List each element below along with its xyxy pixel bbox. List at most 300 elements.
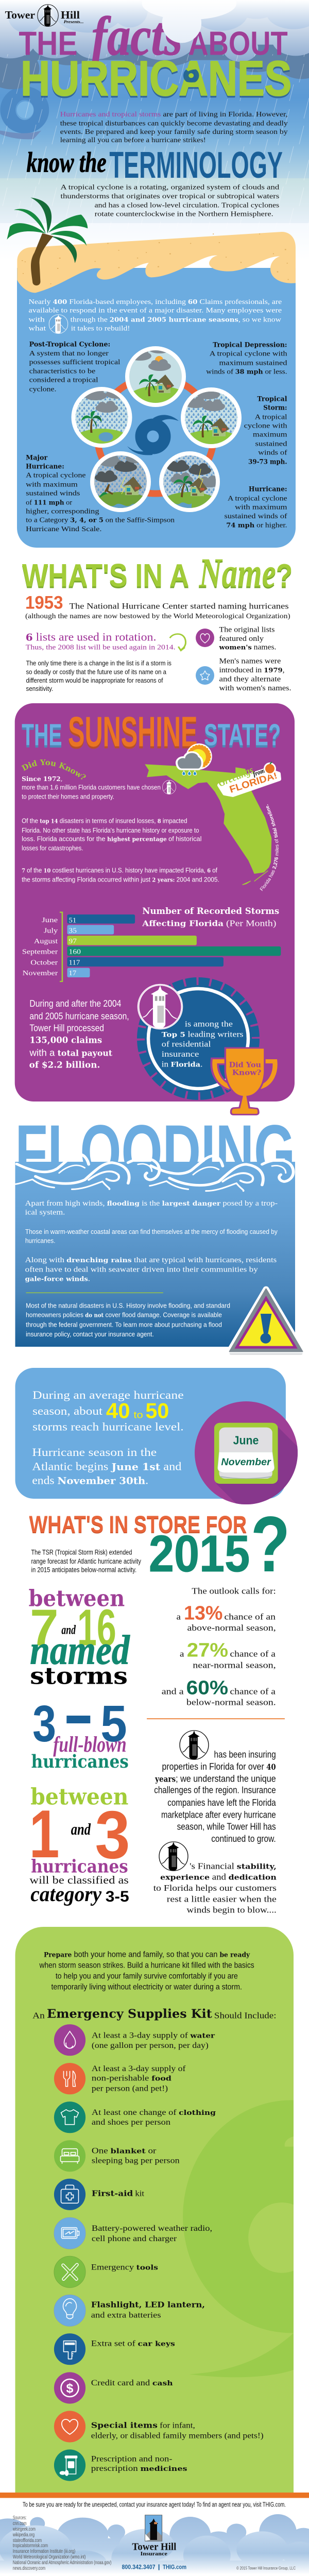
text: employees note: what	[28, 325, 46, 332]
text: flood insurance: insurance policy, contact your insurance agent.	[26, 1331, 154, 1338]
text: costliest hurricanes	[22, 867, 219, 884]
kit item: flashlight: Flashlight, LED lantern,	[91, 2300, 205, 2309]
heading: what's in store for 2015: 2015	[149, 1525, 250, 1582]
text: insured losses: Of the top 14 disasters in terms of insured losses, 8 impacted	[22, 818, 187, 825]
heading: what's in a name: WHAT'S IN A	[22, 560, 189, 596]
text: outlook: above-normal season,	[187, 1623, 276, 1633]
stat: between 7 and 16 named storms: 16	[77, 1599, 116, 1656]
kit item: medicines: Prescription and non-	[91, 2454, 172, 2463]
text: women's names: featured only	[219, 635, 264, 643]
text: tropical cyclone definition: thunderstorms that originates over tropical or subtropical waters	[60, 193, 279, 200]
text: women's names: The original lists	[219, 626, 274, 634]
text: intro: learning all you can before a hurricane strikes!	[60, 137, 206, 144]
text: outlook: The outlook calls for:	[192, 1586, 276, 1596]
sticker: greetings from Florida: from	[252, 767, 266, 778]
text: financial stability: rest a little easier when the	[167, 1894, 277, 1904]
text: sources: stateofflorida.com	[13, 2538, 42, 2544]
title: The facts about Hurricanes	[19, 6, 291, 108]
badge text: is among the	[185, 1019, 233, 1028]
panel: terminology card	[7, 197, 296, 548]
text: financial stability: experience and dedication	[160, 1872, 277, 1882]
text: employees note	[28, 298, 282, 332]
stat: 3-5 full-blown hurricanes: 5	[100, 1695, 127, 1752]
icon: trophy did you know	[215, 1048, 275, 1114]
kit item: water	[54, 2024, 215, 2056]
text: men's names	[219, 657, 291, 692]
text: Tower Hill insuring Florida: properties in Florida for over 40	[162, 1761, 276, 1772]
text: sensitivity note	[26, 660, 171, 693]
icon: calendar June to November	[195, 1401, 298, 1504]
text: storms per season: 40	[106, 1398, 130, 1423]
logo: Tower Hill Insurance	[132, 2515, 176, 2557]
text: tropical storm: sustained	[255, 440, 287, 448]
badge text: in Florida.	[162, 1060, 202, 1069]
text: hurricane: with maximum	[235, 503, 287, 511]
text: season dates: Atlantic begins June 1st and	[32, 1460, 181, 1473]
heading: know the terminology: know the	[27, 146, 107, 178]
kit item: tools	[54, 2256, 158, 2287]
text: post-tropical cyclone: A system that no longer	[29, 350, 109, 358]
kit item: car keys: Extra set of car keys	[91, 2338, 175, 2348]
text: tropical depression: A tropical cyclone with	[210, 350, 287, 358]
heading: the sunshine state: THE	[22, 720, 62, 754]
text: sensitivity note: sensitivity.	[26, 685, 53, 693]
month labels and values: June	[42, 917, 58, 924]
text: outlook: chance of a	[230, 1649, 276, 1658]
panel: hurricane season	[15, 1368, 309, 1510]
text: prepare: temporarily living without electricity or water during a storm.	[51, 1983, 242, 1991]
month labels and values: July	[44, 927, 58, 935]
text: major hurricane: to a Category 3, 4, or 5 on the Saffir-Simpson	[26, 516, 175, 524]
text: since 1972: Since 1972,	[22, 776, 63, 783]
text: major hurricane: Hurricane:	[26, 463, 64, 470]
kit item: medicines	[54, 2449, 187, 2481]
month labels and values: 160	[69, 948, 81, 956]
stat: between 7 and 16 named storms: 7	[30, 1599, 59, 1656]
text: since 1972	[22, 776, 161, 801]
kit item: special items: Special items for infant,	[91, 2421, 195, 2430]
text: flooding danger	[25, 1199, 278, 1293]
text: post-tropical cyclone	[29, 341, 120, 393]
stat: between 1 and 3 category 3-5: between	[30, 1784, 128, 1810]
text: insured losses: Florida. No other state has Florida's hurricane history or exposure to	[22, 827, 199, 835]
stat: 3-5 full-blown hurricanes: 3	[32, 1695, 56, 1752]
text: men's names: with women's names.	[219, 684, 291, 692]
text: outlook: chance of an	[224, 1612, 276, 1621]
text: claims processed: with a total payout	[29, 1048, 112, 1058]
text: outlook: 13%	[184, 1602, 222, 1624]
title: The facts about Hurricanes: THE	[19, 24, 77, 62]
text: hurricane	[224, 485, 288, 529]
text: major hurricane: higher, corresponding	[26, 508, 99, 515]
dark cloud layer	[0, 21, 309, 89]
text: tropical depression: maximum sustained	[219, 360, 287, 367]
text: 1953 naming history	[25, 592, 290, 620]
kit item: clothing: At least one change of clothing	[92, 2108, 216, 2117]
kit item: blanket	[54, 2140, 180, 2172]
month labels and values: August	[34, 938, 58, 945]
text: sources: Insurance Information Institute (iii.org)	[13, 2549, 75, 2554]
text: storms per season: season, about	[32, 1404, 102, 1418]
text: claims processed: 135,000 claims	[29, 1035, 102, 1045]
icon: calendar June to November: November	[221, 1456, 272, 1468]
text: flood insurance: homeowners policies do not cover flood damage. Coverage is available	[26, 1312, 222, 1319]
stat: between 7 and 16 named storms: and	[61, 1622, 76, 1637]
month labels and values: 117	[69, 959, 80, 967]
text: outlook: a	[176, 1612, 181, 1621]
stat: between 1 and 3 category 3-5: 3-5	[106, 1888, 129, 1905]
badge text	[162, 1019, 244, 1069]
icon: warning triangle	[230, 1289, 302, 1353]
stat: between 1 and 3 category 3-5: category	[30, 1882, 102, 1906]
text: tropical storm: Storm:	[263, 404, 287, 412]
text: tropical cyclone definition: and has a closed low-level circulation. Tropical cyclones	[95, 202, 279, 209]
chart: recorded storms per month	[22, 906, 281, 981]
text: six lists in rotation: 6 lists are used in rotation.	[26, 631, 156, 643]
text: outlook: near-normal season,	[193, 1660, 276, 1670]
text: since 1972: to protect their homes and property.	[22, 793, 114, 801]
stat: between 1 and 3 category 3-5: and	[71, 1821, 91, 1838]
text: employees note: Nearly 400 Florida-based employees, including 60 Claims professionals, are	[28, 298, 282, 306]
text: Tower Hill insuring Florida	[154, 1731, 276, 1844]
chart title: Affecting Florida (Per Month)	[142, 918, 276, 928]
chart title	[142, 906, 279, 928]
kit item: flashlight	[54, 2295, 205, 2326]
icon: heart badge	[196, 629, 214, 647]
heading: what's in store for 2015: ?	[251, 1500, 290, 1588]
kit item: water: (one gallon per person, per day)	[92, 2041, 209, 2050]
text: claims processed: Tower Hill processed	[29, 1023, 104, 1033]
stat: between 7 and 16 named storms: storms	[30, 1663, 128, 1689]
header: rain streaks	[0, 54, 309, 229]
kit item: credit card and cash: $	[66, 2381, 74, 2396]
kit item: credit card and cash	[54, 2372, 173, 2404]
icon: small white tower	[162, 780, 176, 794]
stat: between 1 and 3 category 3-5: 3	[95, 1798, 130, 1873]
text: insured losses	[22, 818, 201, 852]
kit item: clothing	[54, 2102, 216, 2133]
text: tropical storm: A tropical	[255, 413, 287, 421]
text: since 1972: more than 1.6 million Florida customers have chosen	[22, 784, 161, 791]
text: intro: Hurricanes and tropical storms are part of living in Florida. However,	[60, 111, 288, 118]
text: major hurricane: with maximum	[26, 481, 78, 488]
kit item: radio and charger: cell phone and charger	[92, 2234, 177, 2243]
beach sand	[17, 232, 296, 293]
icon: sun and rain cloud	[177, 743, 212, 775]
stat: 3-5 full-blown hurricanes: hurricanes	[31, 1751, 129, 1772]
text: 1953 naming history: 1953	[25, 592, 63, 613]
text: claims processed	[29, 998, 129, 1070]
text: flooding danger: Along with drenching rains that are typical with hurricanes, residents	[25, 1256, 277, 1264]
text: hurricane: Hurricane:	[249, 485, 287, 493]
footer clouds	[0, 2514, 309, 2576]
heading: know the terminology	[27, 144, 283, 186]
scene: tropical depression	[125, 346, 186, 407]
map: Florida	[145, 764, 271, 885]
badge text: Top 5 leading writers	[162, 1029, 244, 1039]
text: employees note: with	[28, 316, 45, 324]
text: tropical storm: maximum	[253, 431, 287, 438]
month labels and values: 17	[69, 970, 77, 977]
text: hurricane: 74 mph or higher.	[226, 521, 287, 529]
text: storms per season: During an average hurricane	[32, 1388, 184, 1402]
badge text: of residential	[162, 1040, 211, 1048]
text: flooding danger: often have to deal with seawater driven into their communities by	[25, 1265, 258, 1274]
text: TSR forecast: The TSR (Tropical Storm Risk) extended	[31, 1548, 132, 1556]
month labels and values: September	[22, 948, 58, 956]
text: tropical storm: Tropical	[257, 395, 287, 403]
text: sources: National Oceanic and Atmospheric Administration (noaa.gov)	[13, 2560, 111, 2566]
text: storms per season: 50	[145, 1398, 169, 1423]
text: outlook: a	[180, 1649, 184, 1658]
text: sources: wisegeek.com	[12, 2527, 36, 2532]
text: TSR forecast: in 2015 anticipates below-normal activity.	[31, 1566, 136, 1574]
text: prepare	[39, 1950, 254, 1991]
text: outlook: and a	[162, 1686, 184, 1696]
text: hurricane: A tropical cyclone	[228, 495, 287, 502]
header: foreground white clouds	[142, 0, 236, 43]
scene: major hurricane	[90, 451, 151, 512]
text: major hurricane: Major	[26, 454, 48, 462]
text: intro	[60, 111, 288, 144]
stat: between 1 and 3 category 3-5	[29, 1784, 130, 1906]
logo: Tower Hill presents: Hill	[61, 9, 80, 21]
heading: emergency supplies kit: Should Include:	[214, 2010, 276, 2020]
logo: Tower Hill Insurance: Insurance	[140, 2551, 167, 2557]
text: Tower Hill insuring Florida: continued to grow.	[211, 1834, 276, 1844]
stat: 3-5 full-blown hurricanes	[31, 1695, 129, 1772]
text: costliest hurricanes: 7 of the 10 costliest hurricanes in U.S. history have impacted Florida, 6 of	[22, 867, 217, 874]
heading: emergency supplies kit: Emergency Supplies Kit	[47, 2006, 212, 2021]
text: outlook: 60%	[186, 1676, 228, 1699]
text: tropical cyclone definition: A tropical cyclone is a rotating, organized system of clouds and	[60, 184, 280, 191]
badge: top 5 writers	[138, 982, 255, 1095]
text: post-tropical cyclone: characteristics to be	[29, 368, 96, 375]
text: post-tropical cyclone: cyclone.	[29, 385, 56, 393]
text: women's names	[219, 626, 276, 651]
icon: trophy did you know: Know?	[232, 1069, 262, 1077]
icon: background hurricane swirl	[0, 93, 41, 139]
kit item: medicines: prescription medicines	[91, 2464, 187, 2473]
text: 1953 naming history: The National Hurricane Center started naming hurricanes	[70, 602, 289, 611]
text: flooding danger: gale-force winds.	[25, 1275, 90, 1283]
month labels and values: November	[23, 970, 58, 977]
icon: calendar June to November: June	[233, 1434, 259, 1447]
curved text: tidal shoreline: Florida has 2,276 miles of tidal shoreline.	[260, 804, 279, 891]
text: major hurricane: A tropical cyclone	[26, 472, 86, 479]
stat: between 1 and 3 category 3-5: hurricanes	[31, 1856, 128, 1877]
kit item: car keys	[54, 2333, 175, 2365]
stat: between 7 and 16 named storms: between	[28, 1585, 125, 1612]
text: season dates	[32, 1446, 181, 1487]
logo: Tower Hill Insurance: Tower Hill	[132, 2541, 176, 2552]
sticker: greetings from Florida	[216, 762, 279, 795]
icon: trophy did you know: Did You	[229, 1061, 261, 1069]
text: sensitivity note: so deadly or costly that the future use of its name on a	[26, 668, 166, 676]
text: tropical depression: Tropical Depression:	[213, 341, 287, 349]
icon: white tower logo	[49, 315, 68, 333]
heading: what's in a name: WHAT'S IN A	[22, 558, 189, 594]
text: storms per season	[32, 1388, 184, 1433]
sticker: greetings from Florida: FLORIDA!	[228, 770, 279, 795]
text: employees note: available to respond in the event of a major disaster. Many employees were	[28, 307, 282, 314]
text: TSR forecast: range forecast for Atlantic hurricane activity	[31, 1557, 141, 1566]
stat: between 1 and 3 category 3-5: 1	[29, 1797, 60, 1872]
text: prepare: to help you and your family survive comfortably if you are	[56, 1972, 238, 1980]
text: post-tropical cyclone: Post-Tropical Cyclone:	[29, 341, 110, 348]
waves	[16, 1154, 294, 1191]
logo: Tower Hill presents	[5, 5, 84, 26]
text: tropical depression: winds of 38 mph or less.	[206, 368, 287, 376]
text: insured losses: losses for catastrophes.	[22, 845, 83, 852]
text: men's names: introduced in 1979,	[219, 666, 285, 674]
text: major hurricane	[26, 454, 175, 533]
kit item: radio and charger: Battery-powered weather radio,	[92, 2224, 212, 2233]
text: Tower Hill insuring Florida: years; we understand the unique	[154, 1774, 276, 1784]
text: six lists in rotation	[26, 631, 176, 651]
text: claims processed: of $2.2 billion.	[29, 1060, 100, 1070]
text: flooding danger: hurricanes.	[25, 1238, 56, 1245]
month labels and values: 51	[69, 917, 76, 924]
text: sources: tropicalstormrisk.com	[13, 2543, 48, 2549]
text: men's names: and they alternate	[219, 675, 281, 683]
text: season dates: Hurricane season in the	[32, 1446, 157, 1459]
text: women's names: women's names.	[219, 643, 276, 651]
text: employees note: it takes to rebuild!	[71, 325, 130, 332]
text: outlook: 27%	[187, 1639, 228, 1661]
logo: Tower Hill presents: Presents...	[64, 20, 84, 24]
kit item: tools: Emergency tools	[91, 2263, 158, 2272]
text: hurricane: sustained winds of	[224, 513, 288, 520]
text: flood insurance: Most of the natural disasters in U.S. History involve flooding, and standard	[26, 1302, 230, 1310]
kit item: special items: elderly, or disabled family members (and pets!)	[91, 2431, 264, 2440]
heading: what's in a name	[22, 550, 293, 597]
title: The facts about Hurricanes: facts	[92, 6, 182, 66]
panel: emergency kit	[15, 1927, 309, 2493]
scene: tropical storm	[181, 387, 242, 448]
kit item: first aid	[54, 2179, 145, 2210]
month labels and values	[22, 917, 81, 977]
text: intro: events. Be prepared and keep your family safe during storm season by	[60, 128, 288, 136]
text: intro: these tropical disturbances can quickly become devastating and deadly	[60, 120, 288, 127]
text: insured losses: loss. Florida accounts for the highest percentage of historical	[22, 836, 201, 843]
text: sources: wikipedia.org	[12, 2532, 35, 2538]
kit item: radio and charger	[54, 2217, 212, 2249]
text: financial stability	[153, 1842, 277, 1914]
text: flooding danger: ical system.	[25, 1209, 65, 1216]
heading: emergency supplies kit: An	[32, 2010, 45, 2020]
text: tropical storm	[244, 395, 288, 466]
heading: what's in a name: ?	[276, 560, 293, 596]
text: TSR forecast	[31, 1548, 141, 1574]
text: claims processed: and 2005 hurricane season,	[29, 1011, 129, 1022]
scene: hurricane	[159, 451, 220, 512]
icon: rotation arrow	[170, 634, 185, 651]
scene: post-tropical cyclone	[71, 387, 132, 448]
text: Tower Hill insuring Florida: has been insuring	[214, 1750, 276, 1760]
text: sources: cnn.com	[13, 2521, 27, 2527]
text: tropical storm: winds of	[258, 449, 288, 456]
text: employees note: through the 2004 and 2005 hurricane seasons, so we know	[71, 316, 281, 324]
kit item: food	[54, 2063, 186, 2094]
kit item: clothing: and shoes per person	[92, 2117, 170, 2127]
icon: palm tree	[7, 197, 88, 285]
text: tropical storm: cyclone with	[244, 422, 287, 430]
logo: Tower Hill presents: Tower	[5, 9, 35, 21]
month labels and values: October	[30, 959, 58, 967]
kit item: water: At least a 3-day supply of water	[92, 2031, 215, 2040]
stat: between 7 and 16 named storms: named	[30, 1627, 130, 1673]
curved text: did you know: Did You Know?	[21, 759, 86, 779]
text: storms per season: to	[133, 1410, 143, 1420]
text: sensitivity note: The only time there is a change in the list is if a storm is	[26, 660, 171, 667]
text: costliest hurricanes: the storms affecting Florida occurred within just 2 years: 2004 and 2005.	[22, 876, 219, 884]
text: sources: Sources:	[13, 2515, 27, 2521]
kit item: blanket: One blanket or	[92, 2146, 157, 2155]
heading: what's in a name: ?	[276, 558, 293, 594]
text: outlook: chance of a	[230, 1686, 276, 1696]
text: prepare: when storm season strikes. Build a hurricane kit filled with the basics	[39, 1961, 254, 1970]
text: financial stability: 's Financial stability,	[190, 1861, 277, 1871]
kit item: blanket: sleeping bag per person	[92, 2156, 180, 2165]
text: sources: World Meteorological Organization (wmo.int)	[13, 2554, 85, 2560]
kit item: credit card and cash: Credit card and cash	[91, 2378, 173, 2387]
bars	[60, 912, 281, 981]
heading: what's in store for 2015	[29, 1500, 290, 1588]
text: season dates: ends November 30th.	[32, 1474, 148, 1487]
text: financial stability: to Florida helps our customers	[153, 1883, 277, 1893]
text: major hurricane: of 111 mph or	[26, 499, 72, 506]
decorative swirl	[183, 2100, 294, 2377]
kit item: food: non-perishable food	[92, 2073, 171, 2082]
stat: between 7 and 16 named storms	[28, 1585, 130, 1689]
text: contact details	[122, 2564, 186, 2570]
text: major hurricane: Hurricane Wind Scale.	[26, 526, 101, 533]
kit item: food: At least a 3-day supply of	[92, 2064, 186, 2073]
kit item: special items	[54, 2411, 264, 2443]
text: contact details: 800.342.3407	[122, 2564, 156, 2570]
orange connecting ring	[97, 377, 214, 494]
text: outlook: below-normal season.	[186, 1697, 276, 1707]
mid cloud layer	[0, 0, 309, 62]
text: sensitivity note: different storm would be inappropriate for reasons of	[26, 677, 163, 685]
kit item: flashlight: and extra batteries	[91, 2310, 161, 2319]
kit item: food: per person (and pet!)	[92, 2083, 168, 2093]
heading: the sunshine state: THE	[22, 718, 62, 752]
text: sources	[12, 2515, 111, 2571]
text: major hurricane: sustained winds	[26, 490, 80, 497]
text: tropical cyclone definition: rotate counterclockwise in the Northern Hemisphere.	[95, 210, 273, 218]
sticker: greetings from Florida: Greetings	[216, 763, 255, 789]
text: flood insurance: through the federal government. To learn more about purchasing a flood	[26, 1321, 222, 1329]
text: post-tropical cyclone: considered a tropical	[29, 377, 98, 384]
top cloud layer	[0, 0, 309, 32]
text: tropical cyclone definition	[60, 184, 280, 218]
header: sky and storm clouds	[0, 0, 309, 260]
text: six lists in rotation: Thus, the 2008 list will be used again in 2014.	[26, 644, 176, 651]
text: claims processed: During and after the 2004	[29, 998, 121, 1009]
text: sources: news.discovery.com	[13, 2566, 45, 2571]
icon: central hurricane symbol	[127, 415, 179, 455]
footer band	[0, 2493, 309, 2498]
text: flood insurance	[26, 1302, 230, 1338]
stat: 3-5 full-blown hurricanes: full-blown	[53, 1732, 127, 1757]
panel: the sunshine state	[14, 703, 295, 1115]
month labels and values: 97	[69, 938, 77, 945]
icon: star badge	[196, 666, 214, 685]
kit item: first aid: First-aid kit	[92, 2189, 145, 2198]
text: men's names: Men's names were	[219, 657, 281, 665]
